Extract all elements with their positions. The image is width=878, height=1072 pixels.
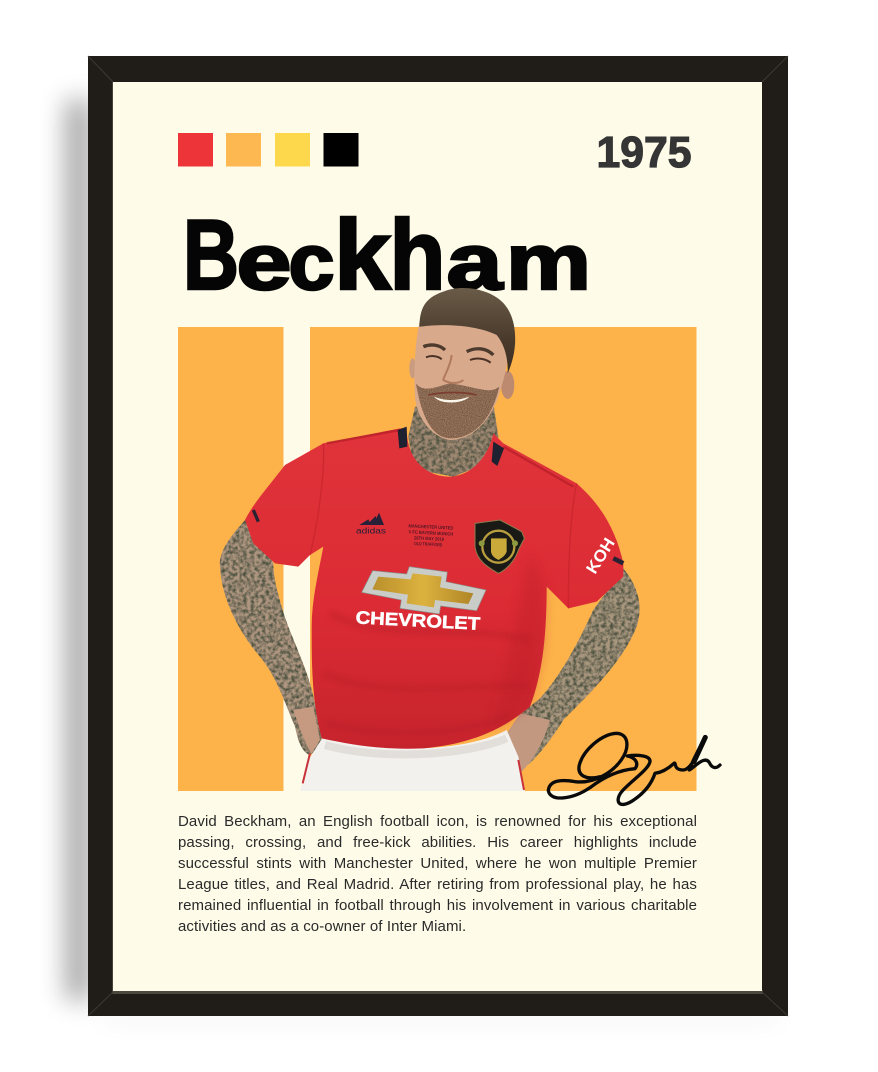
red Manchester United shirt (245, 427, 623, 749)
biography text block: activities and as a co-owner of Inter Miami. (178, 918, 466, 935)
white shorts (300, 730, 525, 791)
biography text block: remained influential in football through his involvement in various charitable (178, 897, 697, 914)
biography text block: successful stints with Manchester United, where he won multiple Premier (178, 855, 697, 872)
Chevrolet wordmark: CHEVROLET (355, 607, 481, 634)
year 1975: 1975 (596, 128, 692, 177)
match text on shirt: MANCHESTER UNITED (408, 523, 454, 531)
adidas logo: adidas (356, 525, 387, 535)
colour swatches (178, 133, 358, 166)
title Beckham: e (236, 217, 292, 306)
title Beckham: B (183, 199, 239, 310)
title Beckham: a (446, 217, 504, 306)
neck with tattoos (408, 403, 498, 477)
right tattooed arm (497, 568, 640, 773)
sleeve sponsor: KOH (582, 535, 619, 577)
match text on shirt: 26TH MAY 2019 (414, 535, 445, 542)
black picture frame (88, 56, 788, 1016)
left tattooed arm (220, 518, 322, 755)
signature (548, 733, 720, 804)
biography text block (178, 812, 697, 935)
title Beckham: k (334, 199, 392, 310)
title Beckham: h (390, 199, 446, 310)
title Beckham: c (288, 217, 334, 306)
title Beckham: m (506, 217, 591, 306)
head (409, 288, 515, 440)
club crest (475, 520, 524, 573)
cream poster paper (113, 82, 762, 991)
match text on shirt: V FC BAYERN MUNICH (408, 529, 454, 537)
Chevrolet bowtie logo (362, 567, 486, 614)
match text on shirt: OLD TRAFFORD (414, 541, 443, 548)
match text on shirt (408, 523, 454, 548)
biography text block: League titles, and Real Madrid. After retiring from professional play, he has (178, 876, 697, 893)
biography text block: David Beckham, an English football icon, is renowned for his exceptional (178, 812, 697, 830)
biography text block: passing, crossing, and free-kick abilities. His career highlights include (178, 834, 697, 851)
adidas logo (356, 513, 387, 535)
player figure (220, 288, 640, 791)
orange panels (178, 327, 696, 791)
